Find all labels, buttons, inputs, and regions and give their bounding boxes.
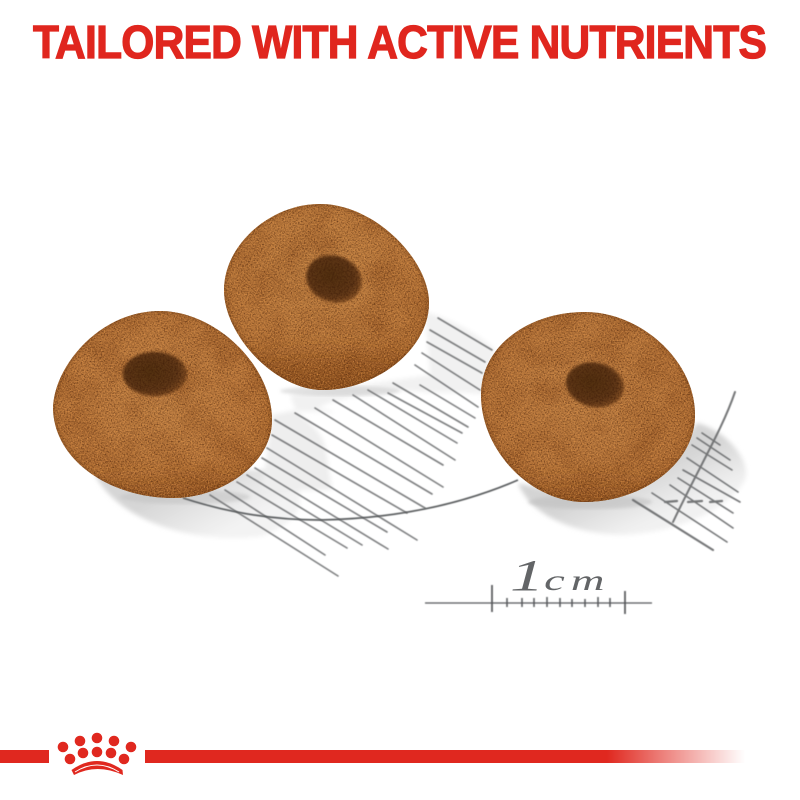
scale bar: 1 cm: [425, 552, 652, 614]
pencil curve linking the kibbles: [183, 480, 518, 520]
footer rule: left segment: [0, 750, 49, 763]
kibble: right: [481, 312, 695, 502]
pencil hatching: left kibbles: [210, 318, 492, 576]
scale label: 1cm: [510, 552, 611, 600]
kibble hole: centre: [300, 248, 368, 310]
scale ruler: [425, 585, 652, 614]
cast shadows beneath the kibbles: [95, 312, 746, 538]
footer rule: right segment with fade: [145, 750, 745, 763]
kibble hole: right: [562, 357, 628, 413]
kibble hole: left: [123, 352, 187, 396]
pencil hatching: right kibble: [633, 392, 740, 550]
kibble: centre: [224, 204, 429, 390]
kibble: left: [53, 311, 272, 498]
title: TAILORED WITH ACTIVE NUTRIENTS: [33, 17, 766, 68]
icon: royal crown logo: [58, 733, 136, 775]
